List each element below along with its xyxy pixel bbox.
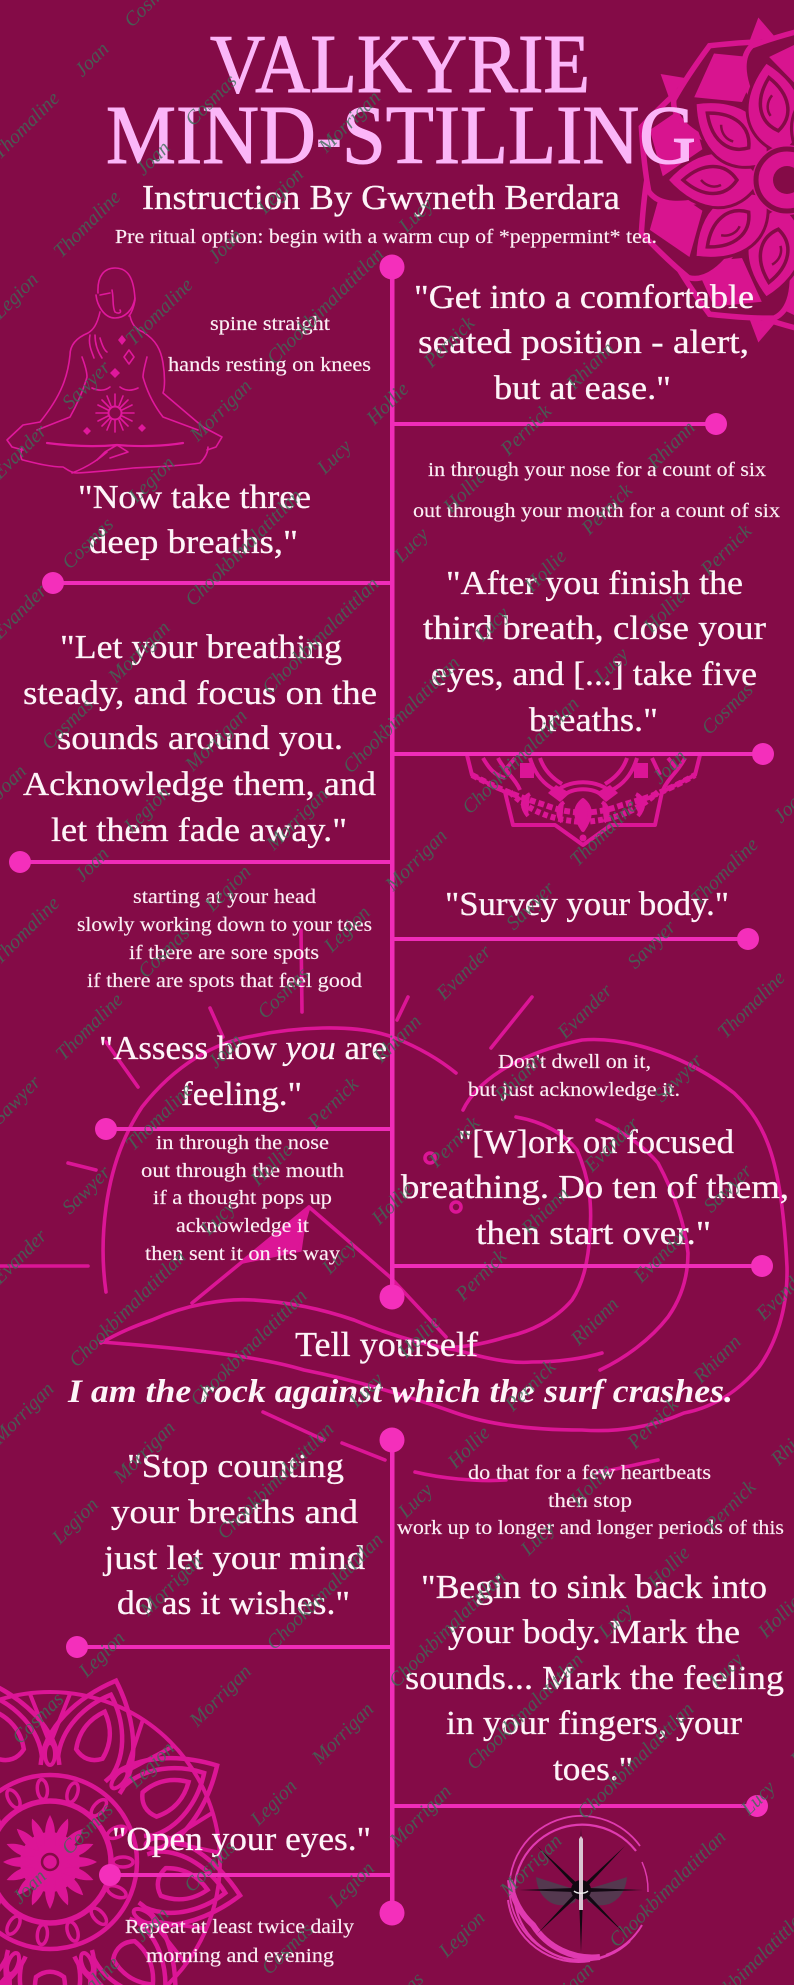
step: assess feeling [99, 1030, 387, 1113]
note: do not dwell: but just acknowledge it. [468, 1079, 680, 1101]
sword [574, 1836, 588, 1910]
step: sink back: "Begin to sink back into [421, 1569, 767, 1606]
note: repeat: morning and evening [146, 1945, 334, 1967]
step: stop counting: your breaths and [111, 1494, 358, 1531]
note: repeat: Repeat at least twice daily [125, 1916, 354, 1938]
star spikes [519, 1828, 643, 1952]
half mandala under third step [467, 755, 700, 845]
watermark: diagonal names: Morrigan Chookbimalatittlan Lucy Hollie Pernick Rhiann Evander Sawyer Thomaline Joan Cosmas [0, 679, 758, 1449]
step: focused breathing: then start over." [476, 1215, 711, 1252]
emblem: sword and star in ring [508, 1816, 648, 1962]
step: three deep breaths: deep breaths," [89, 524, 298, 561]
swirl and lips line drawing [0, 930, 787, 1481]
step: five breaths: breaths." [529, 702, 658, 739]
step: five breaths [423, 565, 767, 739]
icon: chakra diamonds [83, 335, 146, 435]
node: end dot [380, 1900, 404, 1926]
step: focused breathing [401, 1124, 789, 1252]
note: heartbeats: do that for a few heartbeats [468, 1462, 711, 1484]
note: heartbeats: work up to longer and longer periods of this [397, 1517, 784, 1539]
watermark: diagonal names: Cosmas Legion Morrigan Chookbimalatittlan Lucy Hollie Pernick Rhiann Evander Sawyer Thomaline [8, 967, 790, 1749]
mantra: I am the rock against which the surf crashes. [67, 1374, 733, 1410]
step: stop counting: "Stop counting [127, 1448, 344, 1485]
title: VALKYRIE [210, 18, 590, 111]
pre ritual note: Pre ritual option: begin with a warm cup of *peppermint* tea. [115, 226, 657, 248]
branch 1 [392, 413, 727, 435]
step: stop counting [103, 1448, 365, 1622]
note: do not dwell [468, 1051, 680, 1101]
branch 4 [9, 851, 392, 873]
note: breathing thoughts: then sent it on its way [145, 1243, 340, 1265]
step: stop counting: just let your mind [103, 1540, 365, 1577]
step: five breaths: third breath, close your [423, 610, 767, 647]
note: body scan: if there are spots that feel good [87, 970, 362, 992]
step: sounds: let them fade away." [51, 812, 347, 849]
step: sounds: "Let your breathing [60, 629, 342, 666]
node: mid dot upper [380, 1284, 404, 1310]
step: focused breathing: "[W]ork on focused [458, 1124, 734, 1161]
watermark: diagonal names: Joan Cosmas Morrigan Chookbimalatittlan Lucy Hollie Pernick [0, 312, 480, 804]
step: sink back: your body. Mark the [448, 1614, 740, 1651]
note: posture [168, 313, 371, 376]
step: survey your body: "Survey your body." [445, 886, 729, 923]
ring [508, 1816, 648, 1962]
note: breath count [413, 459, 780, 522]
mandala: bottom left [0, 1665, 248, 1985]
branch 6 [95, 1118, 392, 1140]
branch 10 [99, 1864, 392, 1886]
mandala: top right [620, 14, 794, 346]
step: sink back: sounds... Mark the feeling [405, 1660, 784, 1697]
step: sounds: steady, and focus on the [23, 675, 377, 712]
step: sink back: in your fingers, your [446, 1705, 743, 1742]
icon: sun on belly [96, 394, 134, 432]
node: top dot [380, 254, 404, 280]
step: five breaths: "After you finish the [446, 565, 743, 602]
node: mid dot lower [380, 1428, 404, 1452]
note: repeat [125, 1916, 354, 1967]
note: body scan: if there are sore spots [129, 942, 319, 964]
note: posture: spine straight [210, 313, 330, 335]
note: body scan: starting at your head [133, 886, 316, 908]
step: stop counting: do as it wishes." [117, 1585, 350, 1622]
step: three deep breaths [78, 479, 311, 561]
note: breath count: out through your mouth for a count of six [413, 500, 780, 522]
watermark: diagonal names: Thomaline Joan Legion Morrigan Chookbimalatittlan Lucy Hollie Pernick Rhiann [0, 338, 619, 969]
note: breathing thoughts: if a thought pops up [153, 1187, 332, 1209]
branch 5 [392, 928, 759, 950]
wings [536, 1877, 627, 1905]
note: do not dwell: Don't dwell on it, [498, 1051, 651, 1073]
title: MIND-STILLING [106, 89, 696, 182]
step: assess feeling: "Assess how you are [99, 1030, 387, 1067]
watermark: diagonal names: Sawyer Thomaline Cosmas Legion Morrigan Chookbimalatittlan Lucy Hollie Pernick Rhiann [0, 417, 700, 1129]
note: breathing thoughts [141, 1132, 344, 1265]
step: sounds [23, 629, 377, 849]
step: open your eyes: "Open your eyes." [112, 1821, 371, 1858]
note: breath count: in through your nose for a count of six [428, 459, 766, 481]
step: sounds: sounds around you. [57, 720, 343, 757]
step: five breaths: eyes, and [...] take five [431, 656, 757, 693]
note: heartbeats [397, 1462, 784, 1539]
branch 7 [392, 1255, 773, 1277]
note: breathing thoughts: acknowledge it [176, 1215, 309, 1237]
note: body scan: slowly working down to your toes [77, 914, 372, 936]
step: seated position [414, 279, 754, 407]
branch 9 [392, 1795, 768, 1817]
step: three deep breaths: "Now take three [78, 479, 311, 516]
mantra: Tell yourself [295, 1325, 478, 1364]
title [106, 18, 696, 182]
step: seated position: seated position - alert, [418, 324, 749, 361]
step: sounds: Acknowledge them, and [23, 766, 376, 803]
watermark: diagonal names: Evander Cosmas Legion Morrigan Chookbimalatittlan Lucy [0, 194, 438, 644]
note: breathing thoughts: out through the mouth [141, 1160, 344, 1182]
branch 8 [66, 1636, 392, 1658]
step: sink back: toes." [553, 1751, 633, 1788]
step: seated position: but at ease." [494, 370, 671, 407]
note: breathing thoughts: in through the nose [156, 1132, 329, 1154]
step: assess feeling: feeling." [181, 1076, 302, 1113]
watermark: diagonal names: Evander Sawyer Thomaline Joan Cosmas Legion Morrigan Chookbimalatittlan Lucy Hollie Pernick [0, 520, 757, 1289]
note: heartbeats: then stop [548, 1490, 632, 1512]
note: posture: hands resting on knees [168, 354, 371, 376]
mantra [67, 1325, 733, 1410]
step: seated position: "Get into a comfortable [414, 279, 754, 316]
icon: meditating figure [7, 268, 222, 473]
note: body scan [77, 886, 372, 992]
branch 3 [392, 743, 774, 765]
step: focused breathing: breathing. Do ten of them, [401, 1169, 789, 1206]
watermark: diagonal names: Legion Morrigan Chookbimalatittlan Lucy Hollie Pernick Rhiann Evander Sawyer Thomaline Joan [47, 784, 794, 1549]
subtitle: Instruction By Gwyneth Berdara [142, 178, 620, 217]
step: sink back [405, 1569, 784, 1788]
branch 2 [42, 572, 392, 594]
watermark: diagonal names: Joan Cosmas Legion Morrigan Chookbimalatittlan Lucy Hollie Pernick Rhiann Evander Sawyer [8, 1160, 757, 1909]
